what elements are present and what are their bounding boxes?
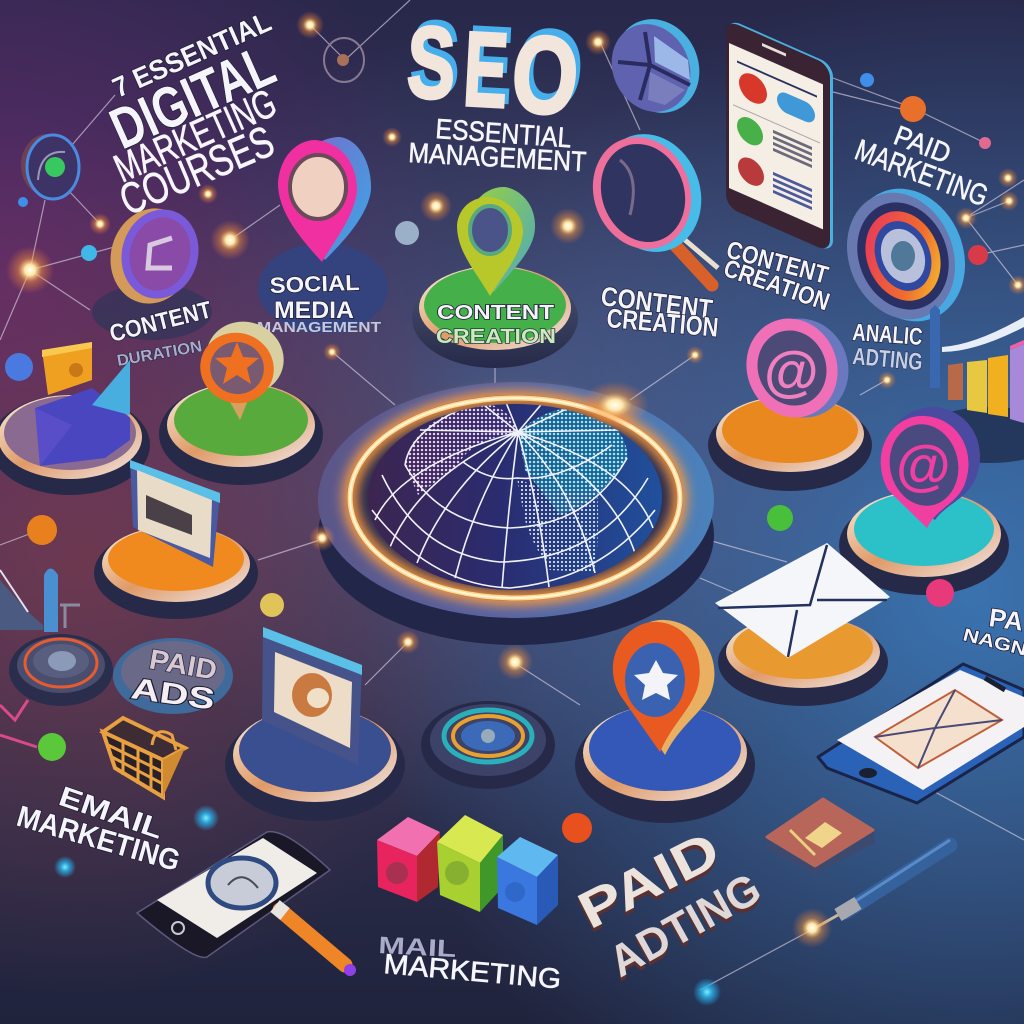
label: social media management: MANAGEMENT [257, 319, 381, 336]
icon: pen [815, 840, 950, 928]
label: mail marketing bottom: MARKETING [382, 948, 563, 994]
phone: top right [726, 18, 833, 254]
label: paid adting bottom: ADTING [601, 868, 769, 991]
label: content creation on pedestal: CONTENT [437, 302, 554, 324]
pedestal: paid ads [113, 638, 233, 717]
label: mail marketing bottom [378, 932, 563, 994]
pedestal: blue with star pin [575, 620, 755, 823]
pedestal: paid ads: ADS [129, 672, 217, 717]
pedestal: 3D folded box left [0, 342, 150, 495]
pedestal: orange with pink at badge [708, 305, 872, 491]
label: email marketing left: EMAIL [55, 780, 167, 845]
label: analytics advertising: ANALIC [852, 319, 923, 351]
heading: SEO: E [465, 5, 515, 125]
pedestal: blue with card [225, 627, 405, 821]
label: content duration: DURATION [116, 338, 203, 370]
label: social media management: MEDIA [274, 297, 354, 324]
label: content duration: CONTENT [107, 296, 215, 348]
label: paid adting bottom: PAID [569, 825, 729, 945]
label: paid marketing: PAID [890, 120, 955, 169]
heading: SEO: S [405, 5, 457, 121]
pedestal: teal with at pin: @ [896, 433, 951, 496]
pedestal: paid ads: PAID [147, 643, 219, 686]
label: social media management [257, 270, 381, 336]
pedestal: teal with at pin [839, 407, 1009, 595]
phone: bottom right with envelope [818, 664, 1024, 803]
label: paid marketing [851, 120, 992, 213]
central globe platform [318, 381, 714, 645]
heading: SEO: S [409, 0, 461, 116]
pedestal: orange with card [94, 460, 258, 619]
pedestal: concentric rings [421, 701, 555, 789]
label: paid marketing right edge [961, 602, 1024, 660]
heading: SEO: O [511, 5, 587, 134]
subheading: essential management [408, 113, 587, 177]
label: mail marketing bottom: MAIL [378, 932, 457, 963]
icon: shopping basket [103, 718, 185, 797]
left edge mini chart [0, 568, 80, 747]
label: content creation on pedestal [436, 302, 556, 348]
pedestal: envelope [715, 543, 890, 706]
title: 7 essential digital marketing courses: DIGITAL [101, 33, 284, 162]
label: paid adting bottom: ADTING [601, 864, 769, 987]
label: content duration [107, 296, 215, 370]
card: brown tile [767, 799, 873, 873]
heading: SEO: O [507, 11, 583, 140]
label: content creation middle [599, 281, 720, 343]
icon: target rings [828, 171, 984, 339]
pedestal: social media with pink pin [258, 137, 388, 333]
heading: SEO [405, 0, 587, 140]
bar chart [920, 305, 1024, 463]
label: paid marketing right edge: NAGN [961, 624, 1024, 660]
title: 7 essential digital marketing courses [101, 6, 284, 225]
label: analytics advertising [851, 319, 924, 376]
subheading: essential management: MANAGEMENT [408, 137, 587, 177]
label: content creation right: CONTENT [723, 236, 831, 290]
label: paid marketing: MARKETING [851, 134, 992, 213]
badge: purple C pedestal [92, 199, 212, 340]
title: 7 essential digital marketing courses: COURSES [113, 117, 281, 225]
label: content creation on pedestal: CREATION [436, 326, 556, 348]
phone: bottom left with magnifier [137, 832, 356, 976]
icon: top globe badge [598, 5, 714, 127]
icon: magnifying glass [577, 120, 718, 285]
icon: small ring node [324, 38, 364, 82]
pedestal: orange with pink at badge: @ [764, 339, 819, 402]
label: social media management: SOCIAL [269, 270, 360, 298]
pedestal: green with orange star pin [159, 311, 323, 485]
label: paid adting bottom: PAID [569, 821, 729, 941]
label: email marketing left: MARKETING [13, 800, 184, 878]
label: content creation right [720, 236, 833, 316]
label: analytics advertising: ADTING [851, 343, 924, 376]
pedestal: small target left [9, 634, 113, 706]
icon: top-left target [21, 134, 79, 199]
heading: SEO: E [461, 10, 511, 130]
subheading: essential management: ESSENTIAL [435, 113, 572, 153]
pedestal: content creation with lime pin [412, 187, 578, 368]
label: content creation middle: CONTENT [599, 281, 715, 325]
label: content creation right: CREATION [720, 254, 833, 316]
title: 7 essential digital marketing courses: MARKETING [108, 81, 283, 191]
label: content creation middle: CREATION [605, 303, 720, 343]
title: 7 essential digital marketing courses: 7 ESSENTIAL [108, 6, 276, 103]
label: paid adting bottom [569, 821, 769, 991]
cubes [377, 815, 558, 925]
globe [368, 400, 662, 590]
